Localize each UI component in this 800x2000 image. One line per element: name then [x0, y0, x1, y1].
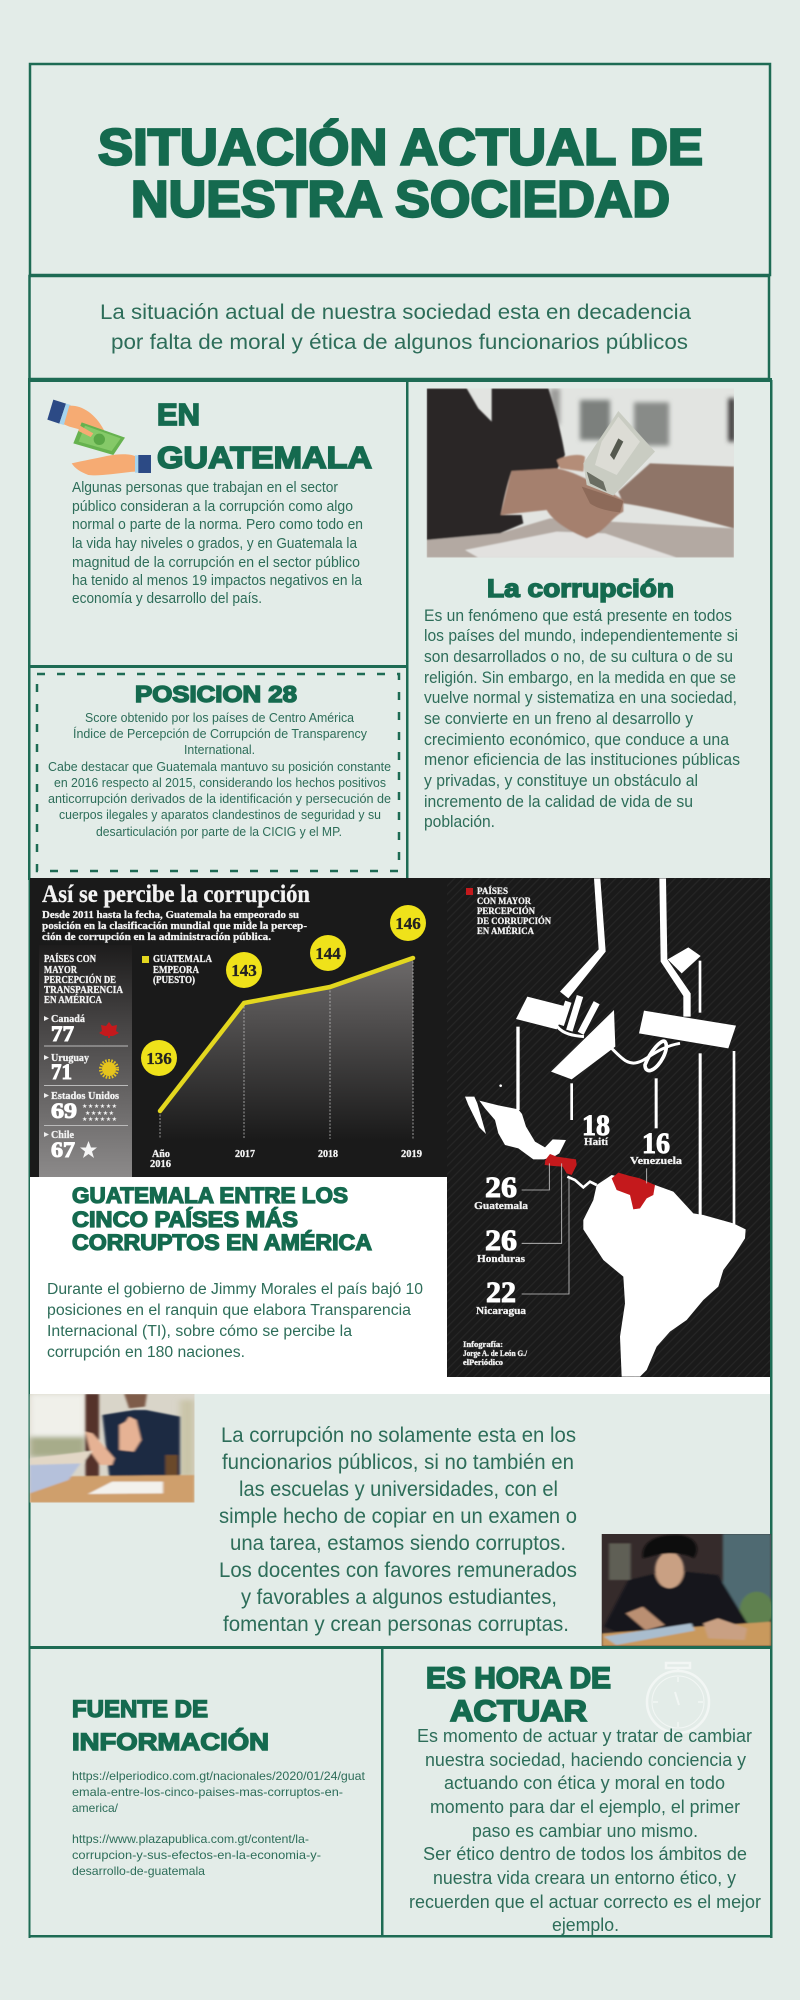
country: Estados Unidos: ★★★★★★	[82, 1103, 117, 1110]
text: chart intro: posición en la clasificación mundial que mide la percep-	[42, 920, 307, 932]
country: Estados Unidos: ★★★★★	[85, 1110, 114, 1117]
x axis labels: 2016	[150, 1159, 171, 1170]
text: la corrupción body	[424, 607, 740, 831]
text: la corrupción body: vuelve normal y sistematiza en una sociedad,	[424, 689, 737, 707]
Baja California	[465, 1097, 486, 1134]
text: es hora body: Ser ético dentro de todos los ámbitos de	[423, 1844, 747, 1864]
panel: bottom grid frame	[29, 1646, 772, 1938]
value: Guatemala: Guatemala	[474, 1200, 529, 1212]
credit: Infografía:	[463, 1340, 503, 1349]
text: source URLs	[72, 1769, 366, 1878]
country: Canadá	[44, 1014, 119, 1046]
text: en Guatemala body: la vida hay niveles o grados, y en Guatemala la	[72, 536, 358, 552]
country: Estados Unidos: Estados Unidos	[51, 1091, 119, 1102]
heading: es hora de actuar	[426, 1662, 611, 1728]
text: la corrupción body: son desarrollados o no, de su cultura o de su	[424, 648, 733, 666]
legend: Guatemala empeora: EMPEORA	[153, 965, 200, 976]
text: la corrupción body: menor eficiencia de las instituciones públicas	[424, 751, 740, 769]
value: Venezuela: Venezuela	[630, 1155, 683, 1167]
text: source URLs: https://elperiodico.com.gt/nacionales/2020/01/24/guat	[72, 1769, 366, 1783]
line chart: Guatemala rank	[141, 905, 426, 1170]
text: source URLs: america/	[72, 1801, 119, 1815]
sidebar heading: PERCEPCIÓN DE	[44, 974, 116, 986]
value: Haití: Haití	[584, 1136, 609, 1148]
text: es hora body: paso es cambiar uno mismo.	[472, 1821, 698, 1841]
legend: red countries: CON MAYOR	[477, 897, 531, 907]
country: Uruguay: 71	[51, 1059, 72, 1084]
Guatemala and Honduras red	[545, 1154, 577, 1175]
heading: fuente: FUENTE DE	[72, 1696, 208, 1723]
text: en Guatemala body: Algunas personas que trabajan en el sector	[72, 480, 338, 496]
subtitle text	[100, 301, 691, 354]
legend: Guatemala empeora	[142, 954, 213, 986]
legend: red countries: PAÍSES	[477, 885, 508, 897]
heading: es hora de actuar: ACTUAR	[450, 1695, 587, 1728]
heading: chart title: Así se percibe la corrupción	[42, 881, 310, 908]
legend: Guatemala empeora: (PUESTO)	[153, 975, 195, 986]
text: en Guatemala body: normal o parte de la norma. Pero como todo en	[72, 517, 363, 533]
text: chart intro	[42, 909, 307, 943]
subtitle text: La situación actual de nuestra sociedad esta en decadencia	[100, 301, 691, 324]
illustration: hands exchanging bribe	[516, 878, 736, 1224]
text: corrupción en escuelas: simple hecho de copiar en un examen o	[219, 1505, 577, 1528]
text: es hora body: recuerden que el actuar correcto es el mejor	[409, 1892, 761, 1912]
country: Chile: 67	[51, 1137, 75, 1162]
map panel: most corrupt countries in America	[447, 878, 770, 1377]
text: posición body: Índice de Percepción de Corrupción de Transparency	[73, 726, 368, 741]
country: Canadá: 77	[51, 1021, 74, 1046]
text: chart intro: Desde 2011 hasta la fecha, Guatemala ha empeorado su	[42, 909, 299, 921]
value: Venezuela	[630, 1127, 683, 1167]
heading: es hora de actuar: ES HORA DE	[426, 1662, 611, 1695]
map: America	[465, 1084, 746, 1377]
subtitle text: por falta de moral y ética de algunos funcionarios públicos	[111, 331, 688, 354]
sidebar heading: EN AMÉRICA	[44, 994, 103, 1006]
panel: grid frame lines	[28, 378, 772, 1938]
legend: red countries	[466, 885, 551, 937]
country: Canadá: Canadá	[51, 1014, 86, 1025]
heading: posición 28: POSICION 28	[135, 681, 297, 707]
text: en Guatemala body: economía y desarrollo del país.	[72, 591, 262, 607]
text: posición body: cuerpos ilegales y aparatos clandestinos de seguridad y su	[59, 808, 381, 822]
data point 146	[390, 905, 426, 941]
panel: posición 28	[37, 674, 399, 871]
value: Guatemala: 26	[485, 1171, 517, 1204]
text: la corrupción body: Es un fenómeno que está presente en todos	[424, 607, 732, 625]
sidebar heading: PAÍSES CON	[44, 953, 97, 965]
text: corrupción en escuelas	[219, 1424, 577, 1636]
sidebar heading	[44, 953, 124, 1006]
icon: receiving hand	[72, 454, 151, 475]
data point 144: 144	[315, 944, 341, 963]
legend: red countries: PERCEPCIÓN	[477, 905, 535, 917]
icon: hands exchanging money	[47, 400, 125, 455]
text: corrupción en escuelas: fomentan y crean personas corruptas.	[223, 1613, 569, 1636]
text: es hora body: nuestra sociedad, haciendo conciencia y	[425, 1750, 746, 1770]
x axis labels	[150, 1149, 422, 1170]
text: la corrupción body: y privadas, y constituye un obstáculo al	[424, 772, 698, 790]
panel: white article background	[30, 1177, 770, 1394]
text: article body: corrupción en 180 naciones.	[47, 1344, 245, 1361]
text: source URLs: corrupcion-y-sus-efectos-en-la-economia-y-	[72, 1848, 321, 1862]
heading: en Guatemala	[157, 397, 372, 475]
legend: red countries: DE CORRUPCIÓN	[477, 915, 551, 927]
panel: subtitle box	[30, 276, 769, 379]
text: posición body: Cabe destacar que Guatemala mantuvo su posición constante	[48, 760, 391, 774]
heading: cinco países: CINCO PAÍSES MÁS	[72, 1207, 298, 1232]
text: article body: Durante el gobierno de Jimmy Morales el país bajó 10	[47, 1281, 423, 1298]
heading: fuente	[72, 1696, 269, 1756]
text: es hora body: actuando con ética y moral en todo	[444, 1773, 725, 1793]
text: posición body: Score obtenido por los países de Centro América	[85, 711, 354, 725]
value: Guatemala	[474, 1171, 529, 1212]
credit	[463, 1340, 528, 1367]
panel: title box	[30, 64, 770, 275]
title	[98, 118, 703, 228]
country: Estados Unidos: 69	[51, 1098, 77, 1123]
chart panel: así se percibe la corrupción	[30, 878, 450, 1177]
data point 144	[310, 935, 346, 971]
value: Honduras: Honduras	[477, 1253, 526, 1265]
text: posición body	[48, 711, 391, 839]
title: SITUACIÓN ACTUAL DE	[98, 118, 703, 176]
photo: businessman at desk	[602, 1534, 774, 1646]
text: corrupción en escuelas: una tarea, estamos siendo corruptos.	[230, 1532, 566, 1555]
data point 136: 136	[146, 1049, 172, 1068]
text: en Guatemala body: ha tenido al menos 19 impactos negativos en la	[72, 573, 363, 589]
sidebar heading: TRANSPARENCIA	[44, 985, 124, 996]
text: en Guatemala body: magnitud de la corrupción en el sector público	[72, 555, 360, 571]
text: source URLs: emala-entre-los-cinco-paises-mas-corruptos-en-	[72, 1785, 343, 1799]
text: source URLs: desarrollo-de-guatemala	[72, 1864, 205, 1878]
value: Nicaragua: Nicaragua	[476, 1305, 527, 1317]
text: la corrupción body: crecimiento económico, que conduce a una	[424, 731, 730, 749]
text: es hora body: Es momento de actuar y tratar de cambiar	[417, 1726, 752, 1746]
text: la corrupción body: se convierte en un freno al desarrollo y	[424, 710, 694, 728]
text: source URLs: https://www.plazapublica.com.gt/content/la-	[72, 1832, 309, 1846]
text: corrupción en escuelas: las escuelas y universidades, con el	[239, 1478, 558, 1501]
text: la corrupción body: los países del mundo, independientemente si	[424, 627, 738, 645]
text: la corrupción body: población.	[424, 813, 495, 831]
text: corrupción en escuelas: La corrupción no solamente esta en los	[221, 1424, 576, 1447]
text: corrupción en escuelas: y favorables a algunos estudiantes,	[241, 1586, 557, 1609]
icon: stopwatch	[647, 1663, 709, 1733]
panel: fuente de información	[72, 1696, 366, 1878]
value: Venezuela: 16	[642, 1127, 670, 1160]
South America	[583, 1175, 746, 1377]
text: article body: posiciones en el ranquin que elabora Transparencia	[47, 1302, 411, 1319]
country: Chile	[44, 1130, 97, 1162]
panel: es hora de actuar	[409, 1662, 761, 1935]
country: Chile: Chile	[51, 1130, 74, 1141]
value: Nicaragua	[476, 1276, 527, 1317]
text: la corrupción body: religión. Sin embargo, en la medida en que se	[424, 669, 736, 687]
text: en Guatemala body	[72, 480, 363, 607]
text: es hora body	[409, 1726, 761, 1935]
heading: la corrupción: La corrupción	[487, 575, 674, 603]
photo: man refusing bribe	[30, 1394, 194, 1503]
value: Nicaragua: 22	[486, 1276, 516, 1309]
panel: article on Guatemala	[47, 1183, 423, 1361]
text: article body	[47, 1281, 423, 1361]
x axis labels: 2018	[318, 1149, 338, 1160]
heading: en Guatemala: EN	[157, 397, 200, 432]
credit: elPeriódico	[463, 1358, 503, 1367]
country: Uruguay: Uruguay	[51, 1053, 90, 1064]
text: corrupción en escuelas: funcionarios públicos, si no también en	[222, 1451, 574, 1474]
text: la corrupción body: incremento de la calidad de vida de su	[424, 793, 693, 811]
text: es hora body: momento para dar el ejemplo, el primer	[430, 1797, 740, 1817]
heading: fuente: INFORMACIÓN	[72, 1728, 269, 1756]
text: posición body: International.	[184, 743, 255, 757]
value: Honduras: 26	[485, 1224, 517, 1257]
legend: red countries: EN AMÉRICA	[477, 925, 534, 937]
heading: en Guatemala: GUATEMALA	[157, 440, 372, 475]
sidebar heading: MAYOR	[44, 965, 78, 976]
country: Estados Unidos: ★★★★★★	[82, 1116, 117, 1123]
credit: Jorge A. de León G./	[463, 1349, 528, 1358]
x axis labels: Año	[152, 1149, 170, 1160]
text: es hora body: nuestra vida creara un entorno ético, y	[433, 1868, 736, 1888]
country: Uruguay	[44, 1053, 118, 1084]
text: article body: Internacional (TI), sobre cómo se percibe la	[47, 1323, 352, 1340]
country: Estados Unidos	[44, 1091, 119, 1123]
text: es hora body: ejemplo.	[552, 1915, 619, 1935]
data point 146: 146	[395, 914, 421, 933]
panel: la corrupción	[424, 388, 740, 831]
data point 143: 143	[231, 961, 257, 980]
heading: cinco países: CORRUPTOS EN AMÉRICA	[72, 1230, 372, 1255]
text: en Guatemala body: público consideran a la corrupción como algo	[72, 499, 353, 515]
text: posición body: en 2016 respecto al 2015, considerando los hechos positivos	[54, 776, 386, 790]
legend: Guatemala empeora: GUATEMALA	[153, 954, 213, 965]
value: Honduras	[477, 1224, 526, 1265]
Hawaii dots	[499, 1084, 502, 1087]
text: chart intro: ción de corrupción en la administración pública.	[42, 931, 271, 943]
panel: en Guatemala	[47, 397, 372, 607]
Central America tail	[567, 1177, 597, 1187]
x axis labels: 2019	[401, 1149, 422, 1160]
title: NUESTRA SOCIEDAD	[131, 170, 670, 228]
text: corrupción en escuelas: Los docentes con favores remunerados	[219, 1559, 577, 1582]
Venezuela red	[612, 1173, 655, 1209]
text: posición body: desarticulación por parte de la CICIG y el MP.	[96, 825, 342, 839]
sidebar: most transparent countries	[39, 945, 132, 1177]
text: posición body: anticorrupción derivados de la identificación y persecución de	[48, 792, 391, 806]
heading: cinco países: GUATEMALA ENTRE LOS	[72, 1183, 348, 1208]
data point 136	[141, 1040, 177, 1076]
data point 143	[226, 952, 262, 988]
Mexico	[479, 1101, 566, 1159]
x axis labels: 2017	[235, 1149, 255, 1160]
value: Haití: 18	[582, 1109, 610, 1142]
heading: cinco países	[72, 1183, 372, 1255]
photo: handshake with money	[427, 388, 735, 558]
